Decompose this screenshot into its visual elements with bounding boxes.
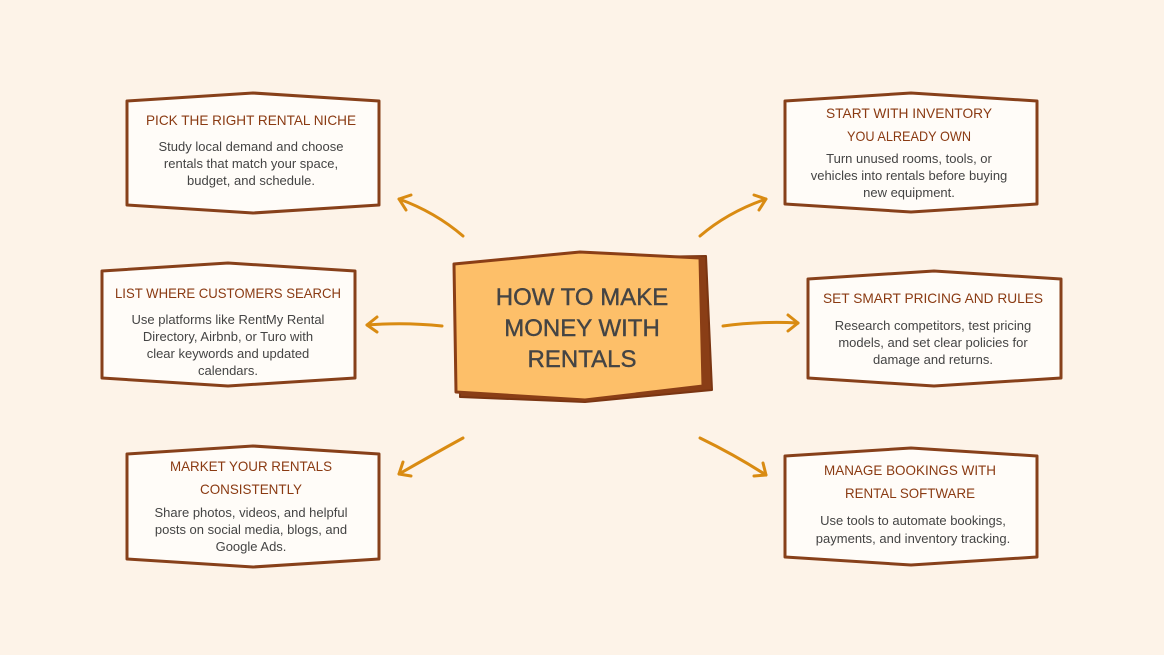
arrow: to listing bbox=[367, 317, 442, 332]
arrow: to software bbox=[700, 438, 766, 476]
panel: inventory: YOU ALREADY OWN bbox=[847, 128, 971, 144]
panel: marketing: MARKET YOUR RENTALS bbox=[170, 458, 332, 474]
panel: pick niche: Study local demand and choose bbox=[158, 139, 344, 154]
panel: marketing: posts on social media, blogs, and bbox=[155, 522, 347, 537]
arrow: to inventory bbox=[700, 195, 766, 236]
panel: pricing: Research competitors, test pricing bbox=[835, 318, 1031, 333]
center title box: RENTALS bbox=[528, 346, 636, 373]
panel: pick niche bbox=[127, 93, 379, 213]
panel: pricing: damage and returns. bbox=[873, 352, 993, 367]
panel: pick niche: rentals that match your space, bbox=[164, 156, 338, 171]
arrow: to pricing bbox=[723, 315, 798, 331]
panel: listing: Use platforms like RentMy Rental bbox=[132, 312, 325, 327]
panel: marketing: Share photos, videos, and helpful bbox=[155, 505, 348, 520]
panel: listing: calendars. bbox=[198, 363, 258, 378]
panel: marketing bbox=[127, 446, 379, 567]
panel: inventory: Turn unused rooms, tools, or bbox=[826, 151, 993, 166]
panel: software bbox=[785, 448, 1037, 565]
panel: listing: Directory, Airbnb, or Turo with bbox=[143, 329, 313, 344]
panel: inventory bbox=[785, 93, 1037, 212]
center title box: MONEY WITH bbox=[504, 315, 660, 342]
panel: inventory: new equipment. bbox=[863, 185, 955, 200]
arrow: to niche bbox=[399, 195, 463, 236]
panel: pick niche: PICK THE RIGHT RENTAL NICHE bbox=[146, 112, 356, 128]
panel: listing bbox=[102, 263, 355, 386]
panel: software: Use tools to automate bookings, bbox=[820, 513, 1006, 528]
panel: inventory: vehicles into rentals before buying bbox=[811, 168, 1007, 183]
panel: pricing bbox=[808, 271, 1061, 386]
panel: listing: LIST WHERE CUSTOMERS SEARCH bbox=[115, 285, 341, 301]
panel: pricing: SET SMART PRICING AND RULES bbox=[823, 290, 1043, 306]
panel: marketing: Google Ads. bbox=[216, 539, 286, 554]
arrow: to marketing bbox=[399, 438, 463, 476]
panel: marketing: CONSISTENTLY bbox=[200, 481, 303, 497]
panel: software: RENTAL SOFTWARE bbox=[845, 485, 975, 501]
panel: software: payments, and inventory tracking. bbox=[816, 531, 1010, 546]
center title box bbox=[454, 252, 712, 402]
panel: inventory: START WITH INVENTORY bbox=[826, 105, 993, 121]
panel: listing: clear keywords and updated bbox=[147, 346, 309, 361]
panel: software: MANAGE BOOKINGS WITH bbox=[824, 462, 996, 478]
panel: pick niche: budget, and schedule. bbox=[187, 173, 315, 188]
panel: pricing: models, and set clear policies for bbox=[838, 335, 1028, 350]
center title box: HOW TO MAKE bbox=[496, 284, 668, 311]
